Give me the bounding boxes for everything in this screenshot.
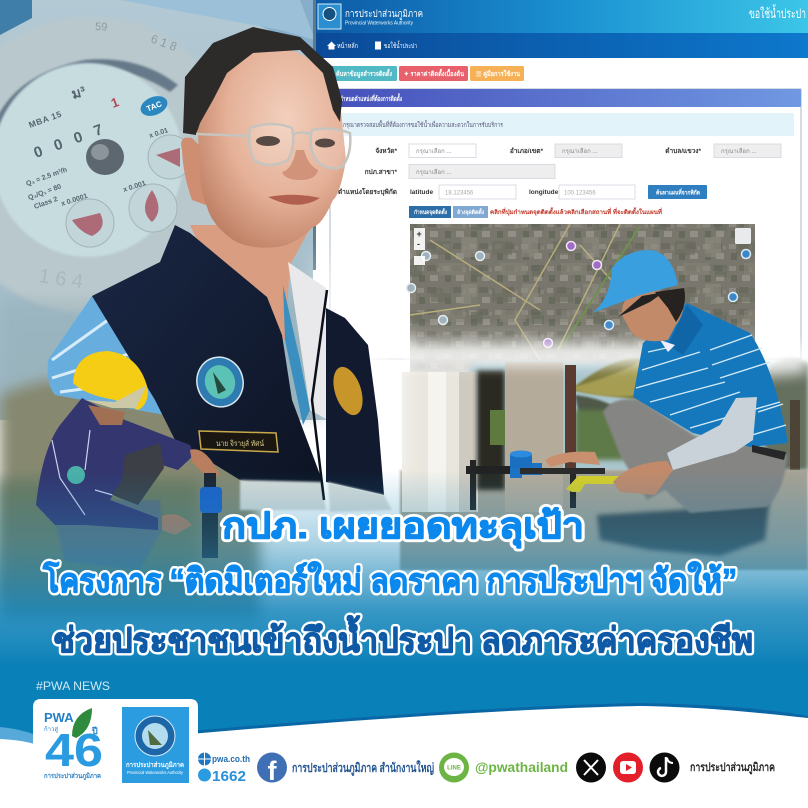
ear [181, 138, 206, 205]
website form panel: longitude [529, 189, 559, 196]
background: water meter photo [0, 0, 330, 420]
technician cap [592, 250, 678, 313]
website tabs: ▦ คู่มือการใช้งาน [476, 69, 520, 79]
website form panel: กปภ.สาขา* [365, 168, 397, 176]
website form panel: ค้นหาแผนที่จากพิกัด [656, 188, 700, 196]
website form panel: กรุณาเลือก ... [721, 147, 757, 155]
icon: tiktok [650, 752, 680, 782]
technician arm sleeve [667, 397, 757, 470]
hashtag: #PWA NEWS [36, 681, 110, 693]
footer white wave [0, 703, 808, 808]
technician head [622, 290, 683, 341]
name tag: นาย จิรายุส์ ทัศน์ [216, 439, 264, 448]
website form panel: กรุณาเลือก ... [416, 168, 452, 176]
field behind worker [0, 379, 260, 620]
eyes [256, 136, 280, 146]
bottom blue fade [0, 470, 808, 710]
background: water meter photo: ม³ [70, 83, 88, 102]
website form panel: กำหนดตำแหน่งที่ต้องการติดตั้ง [340, 92, 402, 103]
PWA 46 years logo: 46 [45, 724, 103, 776]
background: water meter photo: x 0.01 [148, 127, 169, 140]
website form panel: 18.123456 [445, 190, 474, 196]
website screenshot panel [313, 0, 808, 380]
worker knee [112, 443, 164, 505]
sky and palm background [470, 358, 808, 472]
icon: x [576, 752, 606, 782]
white pillars [402, 370, 505, 512]
website tabs: ค้นหาข้อมูลสำรวจติดตั้ง [336, 68, 392, 79]
blue patterned sleeve [48, 296, 165, 415]
worker patch [67, 466, 85, 484]
satellite map: + [416, 229, 422, 239]
vest white hem [240, 480, 326, 510]
background: water meter photo: x 0.0001 [60, 193, 89, 208]
headline line 3: ช่วยประชาชนเข้าถึงน้ำประปา ลดภาระค่าครองชีพ [53, 615, 753, 660]
satellite map: - [417, 239, 420, 249]
website form panel: กรุณาเลือก ... [562, 147, 598, 155]
pipes and meter [466, 365, 605, 510]
technician trousers [603, 399, 787, 513]
PWA emblem square [122, 707, 189, 783]
background: water meter photo: Q₃/Q₁ = 80 [27, 183, 62, 202]
background: water meter photo: 1 6 4 [37, 265, 84, 293]
face [197, 45, 346, 248]
background: water meter photo: 1 [109, 94, 121, 111]
yellow helmet [73, 351, 148, 410]
headline line 2: โครงการ “ติดมิเตอร์ใหม่ ลดราคา การประปาฯ จัดให้” [42, 561, 737, 599]
website navigation bar: ขอใช้น้ำประปา [384, 39, 417, 50]
website header bar [316, 0, 808, 33]
icon: line [439, 752, 469, 782]
website form panel: คลิกที่ปุ่มกำหนดจุดติดตั้งแล้วคลิกเลือกสถานที่ ที่จะติดตั้งในแผนที่ [490, 206, 662, 216]
background: water meter photo: MBA 15 [27, 109, 63, 130]
facebook page name: การประปาส่วนภูมิภาค สำนักงานใหญ่ [292, 760, 434, 776]
concrete pillar [505, 362, 563, 512]
website form panel: ล้างจุดติดตั้ง [457, 207, 484, 216]
PWA emblem square: การประปาส่วนภูมิภาค [126, 761, 184, 770]
icon: line: LINE [447, 766, 461, 772]
ground [400, 470, 808, 570]
headline line 3: ช่วยประชาชนเข้าถึงน้ำประปา ลดภาระค่าครองชีพ [53, 615, 753, 660]
background: water meter photo: x 0.001 [122, 180, 147, 194]
nose [282, 150, 318, 180]
icon: facebook [257, 752, 287, 786]
right photo: technician at water meter [396, 250, 808, 570]
worker with yellow helmet [36, 351, 222, 570]
worker trousers [55, 500, 162, 570]
headline line 2: โครงการ “ติดมิเตอร์ใหม่ ลดราคา การประปาฯ จัดให้” [42, 561, 737, 599]
PWA badge [191, 352, 249, 412]
website form panel: อำเภอ/เขต* [510, 147, 543, 155]
website form panel: กรุณาตรวจสอบพื้นที่ที่ต้องการขอใช้น้ำเพื่อความสะดวกในการรับบริการ [343, 120, 503, 129]
headline line 1: กปภ. เผยยอดทะลุเป้า [222, 505, 584, 549]
glasses [196, 124, 350, 168]
technician belt [752, 445, 786, 460]
website header bar: Provincial Waterworks Authority [345, 20, 413, 26]
technician shoes and shadow [597, 495, 770, 556]
worker hands [190, 449, 220, 478]
icon: youtube [613, 752, 643, 782]
background: water meter photo: 6 1 8 [149, 32, 179, 54]
PWA 46 years logo: PWA [44, 710, 74, 725]
mouth [268, 195, 320, 205]
background: water meter photo: TAC [145, 99, 163, 114]
technician shirt [633, 303, 788, 447]
website form panel: 100.123456 [564, 190, 596, 196]
website and hotline: pwa.co.th [212, 754, 250, 765]
technician left hand [545, 452, 600, 467]
logo card [33, 699, 198, 790]
website form panel [330, 89, 801, 359]
PWA emblem square: Provincial Waterworks Authority [127, 770, 184, 775]
background: water meter photo: Q₃ = 2.5 m³/h [25, 167, 68, 188]
zipper [312, 290, 327, 500]
yellow wrench [566, 476, 625, 492]
PWA 46 years logo: ปี [91, 726, 98, 736]
website navigation bar: หน้าหลัก [337, 42, 358, 50]
dark vest left [92, 225, 322, 500]
gold garuda badge [328, 363, 368, 419]
background: water meter photo: 59 [95, 21, 108, 33]
website form panel: กำหนดจุดติดตั้ง [414, 207, 447, 216]
icon: facebook: f [268, 756, 278, 786]
headline line 1: กปภ. เผยยอดทะลุเป้า [222, 505, 584, 549]
satellite map [405, 224, 760, 380]
PWA 46 years logo: ก้าวสู่ [44, 726, 58, 733]
white glare over photo edge [396, 345, 808, 377]
website and hotline: 1662 [212, 768, 246, 785]
website header bar: การประปาส่วนภูมิภาค [345, 9, 423, 20]
meter dials [66, 135, 192, 247]
website navigation bar [316, 33, 808, 58]
line id: @pwathailand [475, 760, 568, 775]
background: water meter photo: Class 2 [33, 196, 59, 211]
worker jacket [36, 398, 194, 530]
main figure: man in PWA jacket [48, 27, 400, 512]
neck [190, 225, 312, 340]
PWA 46 years logo: การประปาส่วนภูมิภาค [44, 772, 101, 781]
website form panel: latitude [410, 189, 433, 196]
dark vest right [326, 308, 384, 495]
worker head [88, 405, 125, 425]
PWA 46 years logo [44, 708, 103, 781]
water valve [200, 473, 222, 558]
helmet visor [85, 385, 147, 408]
background: water meter photo: 0 0 0 7 [32, 121, 105, 162]
website form panel: ตำแหน่งโดยระบุพิกัด [338, 187, 397, 196]
website form panel: กรุณาเลือก ... [416, 147, 452, 155]
name tag [199, 431, 278, 452]
shirt and collar [283, 262, 328, 425]
website form panel: จังหวัด* [375, 147, 397, 155]
white glow behind figure [320, 250, 400, 480]
website form panel: ตำบล/แขวง* [665, 147, 701, 155]
website tabs [330, 66, 524, 81]
head [181, 27, 350, 248]
hair [183, 27, 342, 135]
social account name: การประปาส่วนภูมิภาค [690, 761, 775, 775]
website tabs: ✦ ราคาค่าติดตั้งเบื้องต้น [404, 68, 464, 78]
website and hotline [198, 752, 250, 785]
technician hand on wrench [613, 461, 673, 495]
